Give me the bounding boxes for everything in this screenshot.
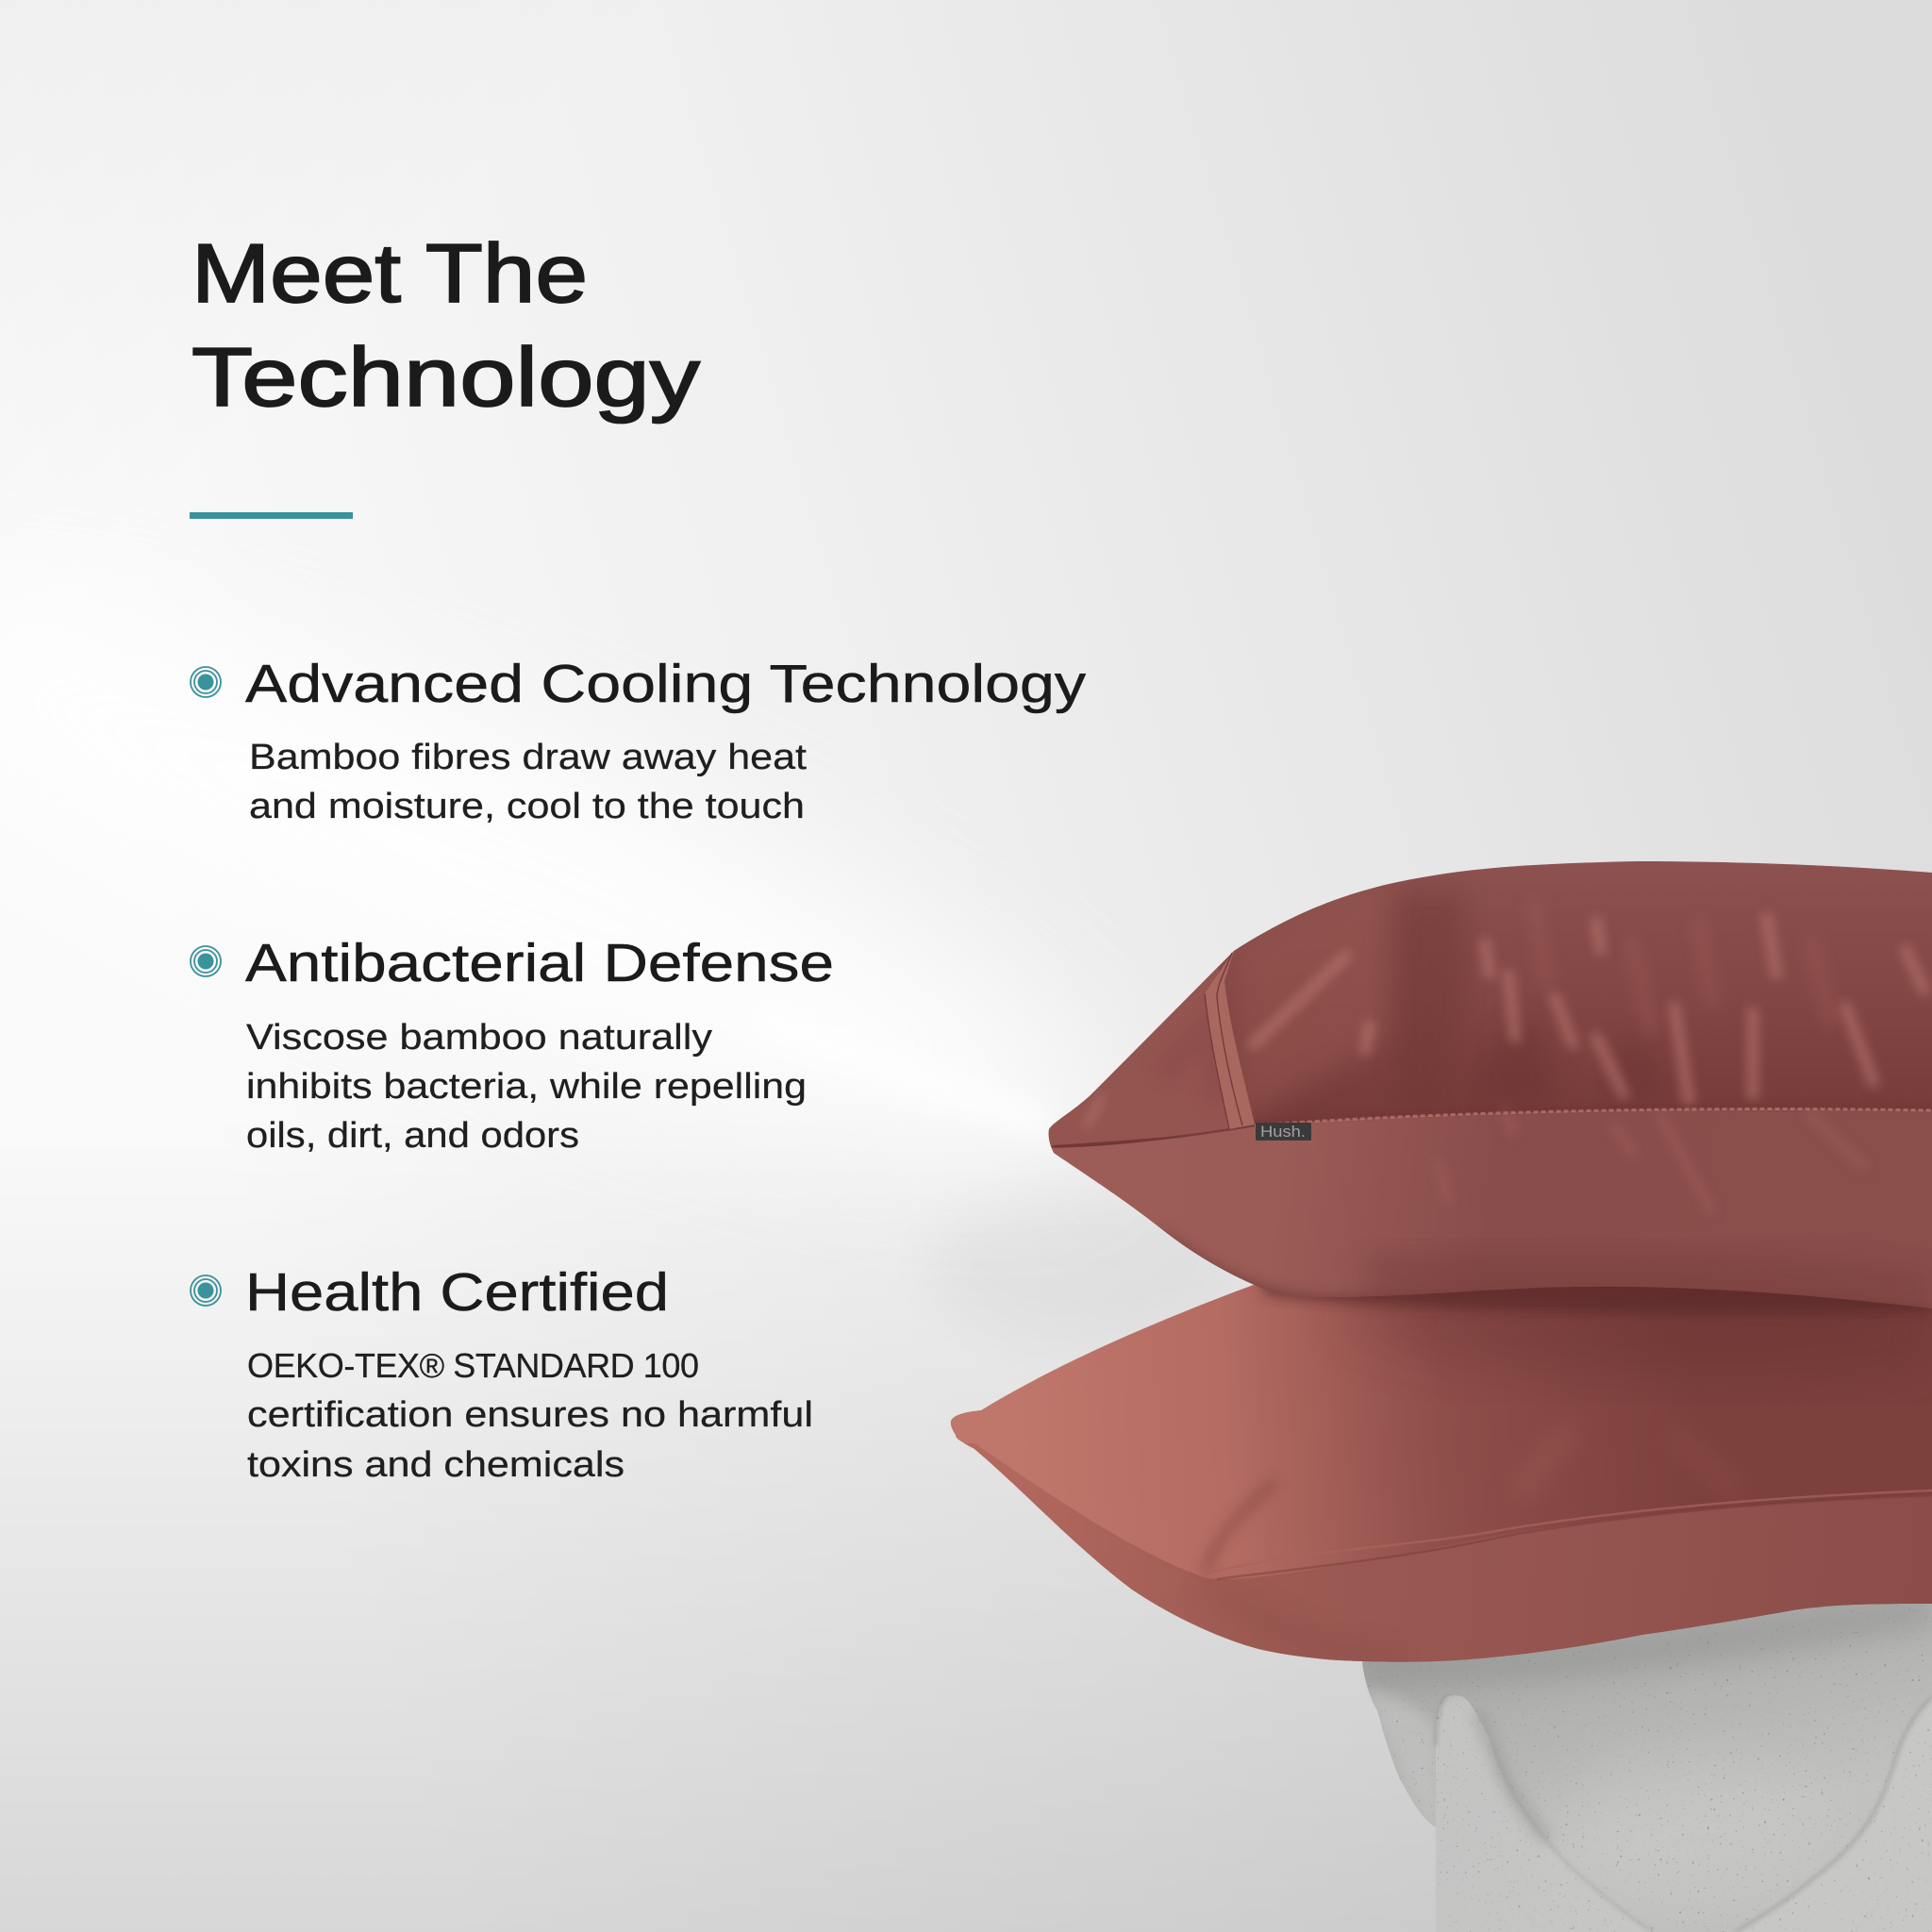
flap stitching [1205, 951, 1255, 1129]
description: Viscose bamboo naturally [246, 1018, 712, 1058]
description: toxins and chemicals [247, 1445, 625, 1485]
title: Meet The [192, 226, 588, 320]
title: Technology [192, 330, 700, 424]
shadow under pillow [1366, 1604, 1928, 1686]
dark soft shading [1395, 891, 1466, 1113]
feature: Antibacterial Defense [191, 933, 834, 1156]
heading: Antibacterial Defense [245, 933, 834, 993]
brand tag: Hush. [1260, 1123, 1306, 1141]
accent divider bar [190, 512, 353, 519]
lit area right of flap [1234, 877, 1396, 1123]
stool leg base [1436, 1695, 1540, 1919]
description: inhibits bacteria, while repelling [246, 1067, 807, 1107]
concrete stool [1362, 1604, 1932, 1932]
corner seam [1055, 1125, 1255, 1146]
pillow: top [1038, 849, 1932, 1340]
feature: Advanced Cooling Technology [191, 654, 1087, 826]
underside shadow [1132, 1231, 1932, 1340]
fold [1205, 1481, 1275, 1572]
lit corner left of flap [1042, 953, 1236, 1146]
icon: target bullet [191, 946, 221, 976]
description: Bamboo fibres draw away heat [249, 738, 807, 777]
shadow cast by top pillow [1257, 1287, 1932, 1317]
lit lobe left of leg [1370, 1691, 1433, 1790]
wrinkle highlights [1519, 1429, 1575, 1500]
description [247, 1346, 813, 1485]
lower panel below seam [1042, 1108, 1932, 1321]
heading: Health Certified [245, 1262, 669, 1323]
lower band below seam [943, 1443, 1932, 1679]
hem seam [1255, 1108, 1932, 1125]
description: oils, dirt, and odors [246, 1116, 579, 1156]
icon: target bullet [191, 1275, 221, 1306]
leg top shading [1436, 1696, 1449, 1745]
pillow: bottom [943, 1264, 1932, 1679]
description [246, 1018, 807, 1156]
upper wrinkle highlights [1254, 918, 1924, 1101]
lower wrinkle highlights [1439, 1110, 1864, 1210]
icon: target bullet [191, 667, 221, 697]
description [249, 738, 807, 826]
bowl edge shading [1477, 1712, 1547, 1840]
stool head and bowl [1362, 1604, 1932, 1826]
title [192, 226, 700, 424]
heading: Advanced Cooling Technology [245, 654, 1087, 714]
feature: Health Certified [191, 1262, 813, 1485]
concrete speckle [1364, 1605, 1932, 1932]
description: certification ensures no harmful [247, 1395, 813, 1435]
description: OEKO-TEX® STANDARD 100 [247, 1346, 699, 1385]
bowl inner lit area [1557, 1764, 1840, 1915]
description: and moisture, cool to the touch [249, 787, 805, 826]
